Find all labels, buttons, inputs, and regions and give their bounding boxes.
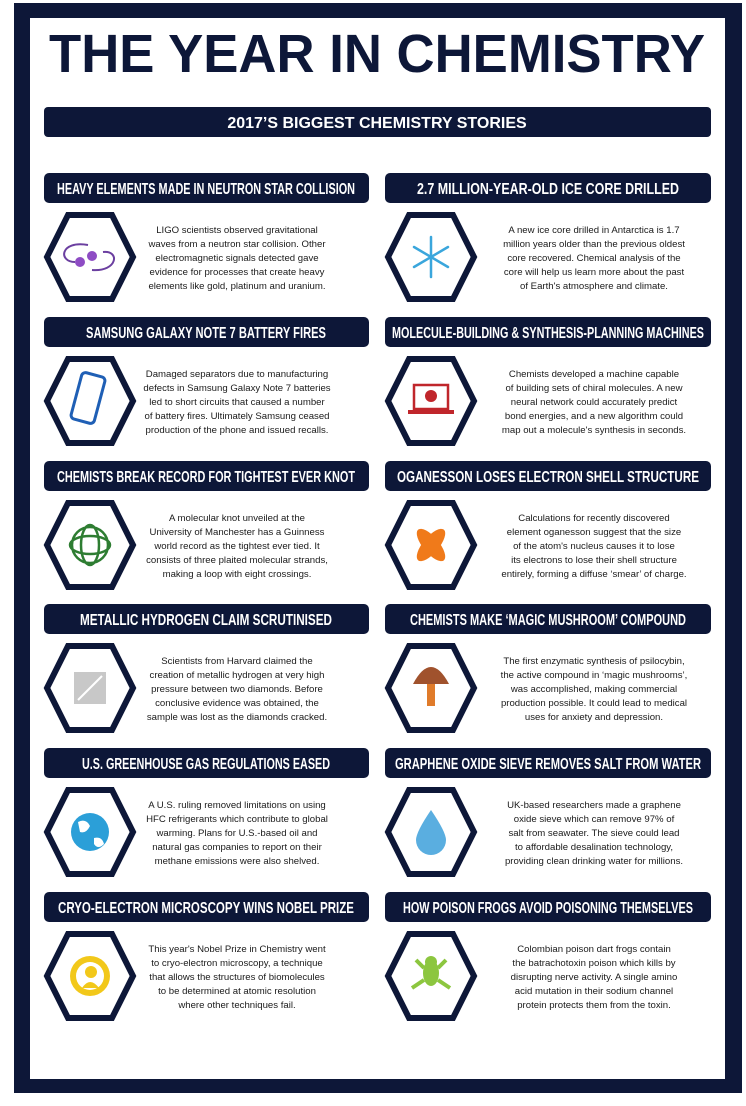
panel: samsung: Damaged separators due to manufacturing [146, 369, 328, 380]
panel: ice core [385, 173, 711, 299]
panel: cryo-em: This year's Nobel Prize in Chemistry went [148, 944, 326, 955]
panel: knot: world record as the tightest ever tied. It [153, 541, 320, 552]
panel: greenhouse: A U.S. ruling removed limitations on using [148, 800, 326, 811]
panel: samsung: led to short circuits that caused a number [149, 397, 326, 408]
panel: samsung [44, 317, 369, 443]
panel: graphene: to affordable desalination technology, [515, 842, 673, 853]
panel: machines [385, 317, 711, 443]
panel: heavy elements [44, 173, 369, 299]
panel: poison frogs: Colombian poison dart frogs contain [517, 944, 671, 955]
panel: ice core: million years older than the previous oldest [503, 239, 685, 250]
panel: knot: CHEMISTS BREAK RECORD FOR TIGHTEST EVER KNOT [57, 469, 355, 486]
panel: poison frogs: protein protects them from the toxin. [517, 1000, 671, 1011]
panel: heavy elements: elements like gold, platinum and uranium. [148, 281, 326, 292]
panel: greenhouse [44, 748, 369, 874]
panel: oganesson: of the atom's nucleus causes it to lose [513, 541, 675, 552]
panel: ice core: of Earth's atmosphere and climate. [520, 281, 668, 292]
panel: greenhouse: warming. Plans for U.S.-based oil and [155, 828, 318, 839]
panel: knot: A molecular knot unveiled at the [169, 513, 305, 524]
panel: poison frogs [385, 892, 711, 1018]
panel: samsung: defects in Samsung Galaxy Note 7 batteries [143, 383, 331, 394]
panel: cryo-em: CRYO-ELECTRON MICROSCOPY WINS NOBEL PRIZE [58, 900, 354, 917]
panel: ice core: core recovered. Chemical analysis of the [507, 253, 681, 264]
panel: ice core: 2.7 MILLION-YEAR-OLD ICE CORE DRILLED [417, 181, 679, 198]
panel: cryo-em [44, 892, 369, 1018]
panel: samsung: SAMSUNG GALAXY NOTE 7 BATTERY FIRES [86, 325, 326, 342]
panel: magic mushroom: was accomplished, making commercial [510, 684, 677, 695]
panel: metallic hydrogen: Scientists from Harvard claimed the [161, 656, 313, 667]
subtitle bar: 2017’S BIGGEST CHEMISTRY STORIES [227, 115, 527, 132]
panel: knot: consists of three plaited molecular strands, [146, 555, 328, 566]
panel: heavy elements: waves from a neutron star collision. Other [147, 239, 326, 250]
panel: machines: of building sets of chiral molecules. A new [505, 383, 683, 394]
panel: cryo-em: where other techniques fail. [177, 1000, 296, 1011]
panel: samsung: production of the phone and issued recalls. [146, 425, 328, 436]
panel: machines: bond energies, and a new algorithm could [505, 411, 683, 422]
subtitle bar [44, 107, 711, 137]
panel: magic mushroom: The first enzymatic synthesis of psilocybin, [503, 656, 685, 667]
panel: metallic hydrogen: pressure between two diamonds. Before [151, 684, 323, 695]
panel: heavy elements: LIGO scientists observed gravitational [156, 225, 318, 236]
panel: greenhouse: U.S. GREENHOUSE GAS REGULATIONS EASED [82, 756, 330, 773]
panel: oganesson: Calculations for recently discovered [518, 513, 670, 524]
panel: metallic hydrogen: METALLIC HYDROGEN CLAIM SCRUTINISED [80, 612, 332, 629]
panel: greenhouse: HFC refrigerants which contribute to global [146, 814, 328, 825]
panel: magic mushroom [385, 604, 711, 730]
panel: graphene [385, 748, 711, 874]
panel: graphene: salt from seawater. The sieve could lead [508, 828, 680, 839]
panel: oganesson: entirely, forming a diffuse ‘smear’ of charge. [501, 569, 687, 580]
panel: cryo-em: to cryo-electron microscopy, a technique [151, 958, 323, 969]
panel: graphene: providing clean drinking water for millions. [505, 856, 683, 867]
panel: poison frogs: disrupting nerve activity. A single amino [511, 972, 677, 983]
panel: heavy elements: HEAVY ELEMENTS MADE IN NEUTRON STAR COLLISION [57, 181, 355, 198]
panel: magic mushroom: uses for anxiety and depression. [525, 712, 663, 723]
title: THE YEAR IN CHEMISTRY [49, 24, 705, 84]
panel: metallic hydrogen: conclusive evidence was obtained, the [155, 698, 319, 709]
panel: metallic hydrogen [44, 604, 369, 730]
panel: heavy elements: electromagnetic signals detected gave [155, 253, 319, 264]
panel: poison frogs: the batrachotoxin poison which kills by [512, 958, 676, 969]
panel: knot: University of Manchester has a Guinness [150, 527, 325, 538]
panel: oganesson [385, 461, 711, 587]
panel: cryo-em: to be determined at atomic resolution [158, 986, 316, 997]
panel: graphene: oxide sieve which can remove 97% of [514, 814, 675, 825]
panel: knot: making a loop with eight crossings. [163, 569, 311, 580]
panel: magic mushroom: production possible. It could lead to medical [501, 698, 687, 709]
panel: samsung: of battery fires. Ultimately Samsung ceased [144, 411, 330, 422]
panel: poison frogs: acid mutation in their sodium channel [515, 986, 673, 997]
panel: machines: Chemists developed a machine capable [509, 369, 679, 380]
panel: machines: map out a molecule's synthesis in seconds. [502, 425, 686, 436]
panel: oganesson: its electrons to lose their shell structure [511, 555, 677, 566]
panel: greenhouse: natural gas companies to report on their [152, 842, 323, 853]
panel: metallic hydrogen: creation of metallic hydrogen at very high [150, 670, 324, 681]
panel: knot [44, 461, 369, 587]
panel: ice core: A new ice core drilled in Antarctica is 1.7 [508, 225, 680, 236]
panel: cryo-em: that allows the structures of biomolecules [149, 972, 325, 983]
panel: oganesson: element oganesson suggest that the size [507, 527, 681, 538]
panel: graphene: UK-based researchers made a graphene [507, 800, 681, 811]
panel: ice core: core will help us learn more about the past [504, 267, 684, 278]
panel: heavy elements: evidence for processes that create heavy [150, 267, 325, 278]
panel: magic mushroom: the active compound in ‘magic mushrooms’, [501, 670, 687, 681]
panel: metallic hydrogen: sample was lost as the diamonds cracked. [147, 712, 327, 723]
panel: machines: neural network could accurately predict [511, 397, 678, 408]
panel: greenhouse: methane emissions were also shelved. [155, 856, 319, 867]
